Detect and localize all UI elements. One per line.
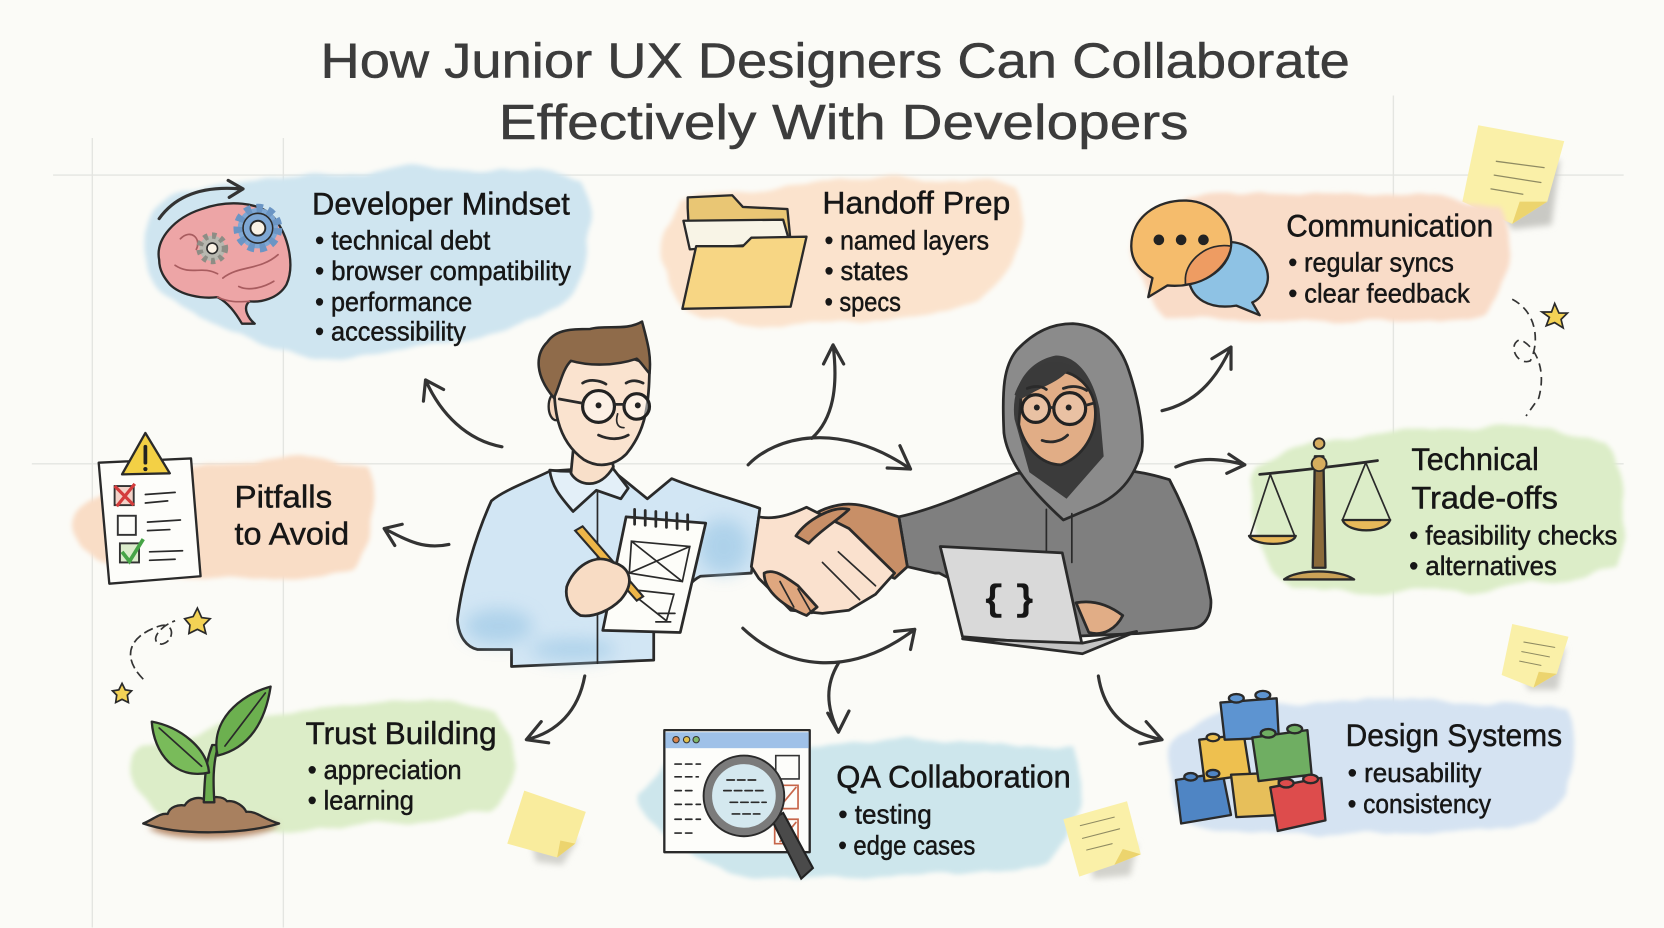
heading: Design Systems bbox=[1346, 717, 1562, 753]
shirt collar bbox=[550, 465, 628, 512]
heading: Handoff Prep bbox=[822, 184, 1010, 220]
icon: building blocks bbox=[1176, 691, 1325, 831]
bullet list: • states bbox=[825, 256, 908, 286]
bullet list: • clear feedback bbox=[1288, 278, 1471, 308]
laptop: { } bbox=[983, 580, 1036, 621]
icon: checklist with warning bbox=[99, 433, 201, 584]
arrow: to handoff prep bbox=[812, 345, 844, 438]
bullet list: • appreciation bbox=[308, 755, 462, 785]
arrow: to developer mindset bbox=[423, 380, 502, 447]
title: How Junior UX Designers Can Collaborate bbox=[320, 34, 1350, 88]
sticky note: top right bbox=[1462, 125, 1564, 229]
notepad with wireframes bbox=[603, 509, 706, 632]
sticky note: bottom left bbox=[507, 791, 586, 865]
panel: communication bbox=[1131, 193, 1509, 322]
hand and pencil bbox=[566, 526, 643, 616]
sticky note: bottom centre bbox=[1063, 801, 1141, 879]
panel: handoff prep bbox=[661, 180, 1024, 325]
arrow: bottom arc developer to designer bbox=[743, 628, 915, 663]
face bbox=[1015, 362, 1095, 465]
heading: Developer Mindset bbox=[312, 185, 570, 221]
bullet list bbox=[308, 755, 462, 816]
heading bbox=[1411, 441, 1558, 515]
icon: sprout bbox=[143, 687, 279, 838]
arrow: top arc designer to developer bbox=[748, 438, 911, 469]
bullet list: • accessibility bbox=[315, 317, 467, 347]
arrow: to pitfalls bbox=[384, 524, 449, 546]
bullet list bbox=[1409, 520, 1617, 581]
hoodie strings bbox=[1046, 509, 1072, 562]
panel: qa collaboration bbox=[642, 730, 1079, 879]
bullet list: • browser compatibility bbox=[315, 256, 572, 286]
bullet list: • specs bbox=[825, 287, 901, 317]
arrow: to communication bbox=[1162, 347, 1231, 411]
hood bbox=[1003, 324, 1142, 520]
bullet list: • reusability bbox=[1348, 758, 1482, 788]
doodle: star and dashed curl bbox=[1512, 299, 1567, 416]
bullet list: • feasibility checks bbox=[1409, 520, 1617, 550]
bullet list: • testing bbox=[838, 800, 932, 830]
heading: Technical bbox=[1411, 441, 1539, 477]
laptop bbox=[940, 547, 1137, 654]
bullet list bbox=[1348, 758, 1492, 819]
icon: balance scales bbox=[1249, 438, 1390, 579]
character: UX designer bbox=[457, 322, 760, 666]
panel: trust building bbox=[132, 687, 514, 838]
bullet list: • edge cases bbox=[838, 830, 975, 860]
sticky note: middle right bbox=[1502, 624, 1568, 690]
icon: browser window with magnifier bbox=[664, 730, 813, 879]
bullet list: • alternatives bbox=[1409, 551, 1557, 581]
icon: folder bbox=[682, 195, 807, 309]
title: Effectively With Developers bbox=[499, 96, 1189, 150]
heading: QA Collaboration bbox=[836, 758, 1071, 794]
bullet list bbox=[1288, 248, 1471, 308]
title bbox=[320, 34, 1350, 150]
panel: pitfalls to avoid bbox=[73, 433, 374, 584]
bullet list bbox=[315, 225, 572, 347]
bullet list: • technical debt bbox=[315, 225, 491, 255]
bullet list: • learning bbox=[308, 786, 414, 816]
heading: to Avoid bbox=[235, 515, 349, 551]
panel: developer mindset bbox=[143, 170, 591, 356]
panel: design systems bbox=[1166, 691, 1574, 835]
arrow: to qa collaboration bbox=[828, 663, 849, 732]
doodle: stars and curl left bbox=[112, 608, 210, 703]
bullet list: • consistency bbox=[1348, 789, 1492, 819]
shirt and body bbox=[457, 467, 760, 666]
panel: technical trade-offs bbox=[1249, 428, 1622, 593]
heading bbox=[235, 478, 349, 551]
hoodie body bbox=[899, 470, 1211, 637]
bullet list bbox=[825, 225, 989, 317]
bullet list: • named layers bbox=[825, 225, 989, 255]
character: developer in hoodie bbox=[899, 324, 1211, 654]
bullet list: • performance bbox=[315, 287, 472, 317]
arrow: to trust building bbox=[526, 676, 585, 743]
icon: brain with gears bbox=[159, 180, 290, 324]
heading: Pitfalls bbox=[235, 478, 332, 514]
face and neck bbox=[539, 322, 650, 484]
handshake bbox=[751, 504, 907, 616]
bullet list bbox=[838, 800, 975, 860]
icon: speech bubbles bbox=[1131, 201, 1268, 315]
bullet list: • regular syncs bbox=[1288, 248, 1454, 278]
developer hand on keyboard bbox=[1076, 602, 1123, 634]
heading: Trade-offs bbox=[1411, 479, 1558, 515]
shirt shading bbox=[465, 519, 749, 660]
heading: Trust Building bbox=[306, 715, 497, 751]
arrow: to design systems bbox=[1098, 676, 1162, 744]
heading: Communication bbox=[1286, 208, 1493, 244]
arrow: to technical trade-offs bbox=[1176, 454, 1245, 473]
